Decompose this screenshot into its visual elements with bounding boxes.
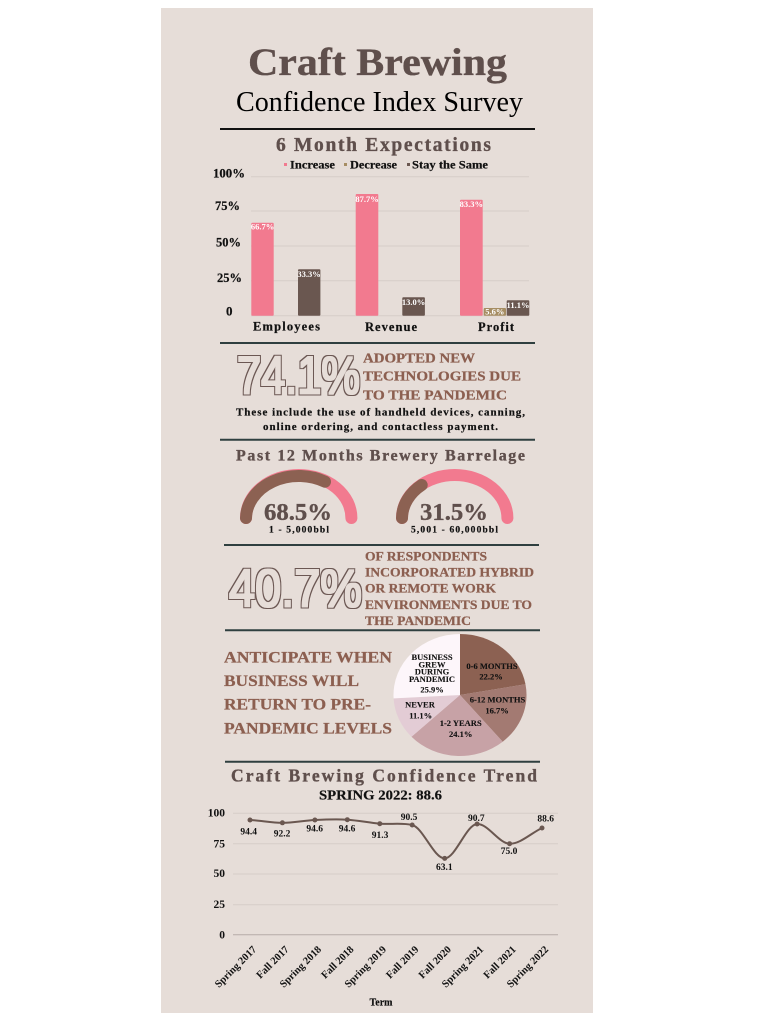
line chart: 0	[219, 930, 225, 942]
statement text	[365, 549, 534, 628]
heading: 6 month expectations: 6 Month Expectations	[276, 135, 491, 156]
statement text: ENVIRONMENTS DUE TO	[365, 598, 532, 612]
pie chart: 16.7%	[485, 705, 509, 715]
line chart: 94.4	[240, 828, 257, 838]
supporting note: online ordering, and contactless payment.	[263, 421, 498, 433]
background panel	[161, 8, 593, 1013]
bar chart: 87.7%	[355, 194, 379, 204]
gauge: 31.5%	[402, 475, 507, 536]
panel: past 12 months brewery barrelage	[236, 448, 525, 536]
pie chart: PANDEMIC	[409, 674, 455, 684]
bar chart: Employees	[253, 320, 320, 334]
panel: 40.7% hybrid or remote work	[229, 549, 534, 628]
bar chart: 75%	[215, 198, 240, 213]
line chart: 100	[208, 808, 225, 820]
statement text: BUSINESS WILL	[224, 673, 359, 690]
chart legend: Increase	[290, 157, 336, 171]
line chart: 25	[214, 899, 225, 911]
line chart: Fall 2017	[255, 944, 292, 981]
bar chart: Revenue	[365, 320, 417, 334]
bar chart: 33.3%	[297, 269, 321, 279]
line chart: 75	[214, 839, 225, 851]
statement text: THE PANDEMIC	[365, 614, 471, 628]
line chart: 90.7	[468, 814, 485, 824]
chart legend: Stay the Same	[412, 157, 489, 171]
gauge: 68.5%: 68.5%	[264, 500, 332, 526]
statement text: OR REMOTE WORK	[365, 582, 496, 596]
big number 40.7%: 40.7%	[229, 559, 362, 618]
line chart: Fall 2021	[482, 944, 519, 981]
pie chart: GREW	[419, 659, 446, 669]
supporting note	[236, 406, 525, 433]
statement text: PANDEMIC LEVELS	[224, 720, 392, 737]
bar chart: 13.0%	[402, 297, 425, 307]
statement text: INCORPORATED HYBRID	[365, 566, 534, 580]
bar chart: 25%	[217, 270, 242, 285]
statement text: TO THE PANDEMIC	[363, 387, 507, 402]
pie chart: 24.1%	[449, 729, 472, 739]
line chart: Spring 2021	[440, 944, 486, 990]
bar chart	[213, 166, 529, 334]
panel: craft brewing confidence trend	[208, 766, 558, 1009]
panel: anticipated return to pre-pandemic levels	[224, 634, 527, 756]
bar chart: 5.6%	[485, 306, 504, 316]
pie chart: BUSINESS	[411, 652, 453, 662]
statement text: RETURN TO PRE-	[224, 697, 371, 714]
line chart	[208, 808, 558, 1009]
gauge: 31.5%: 31.5%	[420, 500, 488, 526]
chart legend	[284, 157, 489, 171]
supporting note: These include the use of handheld devices, canning,	[236, 406, 525, 418]
line chart: Spring 2017	[213, 944, 259, 990]
bar chart: 11.1%	[507, 300, 529, 310]
line chart: 91.3	[372, 831, 389, 841]
line chart: 88.6	[537, 815, 554, 825]
bar chart: 66.7%	[251, 222, 274, 232]
heading: barrelage: Past 12 Months Brewery Barrelage	[236, 448, 525, 465]
panel: 74.1% adopted new technologies	[236, 347, 525, 433]
statement text: ADOPTED NEW	[363, 351, 476, 366]
bar chart: 100%	[213, 166, 245, 181]
line chart: 90.5	[401, 813, 418, 823]
gauge: 68.5%: 1 - 5,000bbl	[269, 526, 329, 536]
bar chart: Profit	[478, 320, 515, 334]
pie chart: 11.1%	[409, 710, 432, 720]
statement text	[363, 351, 521, 402]
pie chart: DURING	[415, 667, 450, 677]
gauge: 31.5%: 5,001 - 60,000bbl	[411, 526, 498, 536]
bar chart: 0	[226, 304, 232, 319]
line chart: 63.1	[436, 863, 453, 873]
line chart: 50	[214, 868, 225, 880]
pie chart: 0-6 MONTHS	[466, 661, 518, 671]
line chart: Fall 2018	[320, 944, 356, 981]
bar chart: 83.3%	[460, 199, 483, 209]
statement text: TECHNOLOGIES DUE	[363, 369, 521, 384]
title	[236, 41, 523, 118]
line chart: Fall 2019	[384, 944, 421, 981]
pie chart: NEVER	[405, 700, 436, 710]
pie chart: 1-2 YEARS	[440, 718, 482, 728]
line chart: Spring 2018	[278, 944, 324, 990]
bar chart: 50%	[216, 235, 241, 250]
line chart: Spring 2022	[505, 944, 551, 990]
pie chart: 25.9%	[420, 685, 444, 695]
statement text: ANTICIPATE WHEN	[224, 649, 392, 666]
statement text: OF RESPONDENTS	[365, 549, 487, 563]
line chart: Spring 2019	[343, 944, 389, 990]
big number 74.1%: 74.1%	[237, 347, 360, 406]
line chart: Term	[370, 998, 393, 1009]
title: Craft Brewing	[248, 41, 508, 84]
panel: 6 month expectations	[213, 135, 529, 334]
line chart: 94.6	[339, 824, 356, 834]
line chart: 92.2	[274, 829, 291, 839]
title: Confidence Index Survey	[236, 87, 523, 118]
pie chart: 6-12 MONTHS	[470, 694, 526, 704]
line chart: Fall 2020	[417, 944, 454, 981]
line chart: 75.0	[501, 847, 518, 857]
statement text	[224, 649, 392, 737]
pie chart	[393, 634, 527, 756]
line chart: 94.6	[306, 824, 323, 834]
gauge: 68.5%	[246, 475, 351, 536]
heading: confidence trend: Craft Brewing Confidence Trend	[231, 766, 537, 786]
subheading: spring 2022 value: SPRING 2022: 88.6	[319, 788, 442, 803]
pie chart: 22.2%	[479, 671, 503, 681]
chart legend: Decrease	[350, 157, 398, 171]
